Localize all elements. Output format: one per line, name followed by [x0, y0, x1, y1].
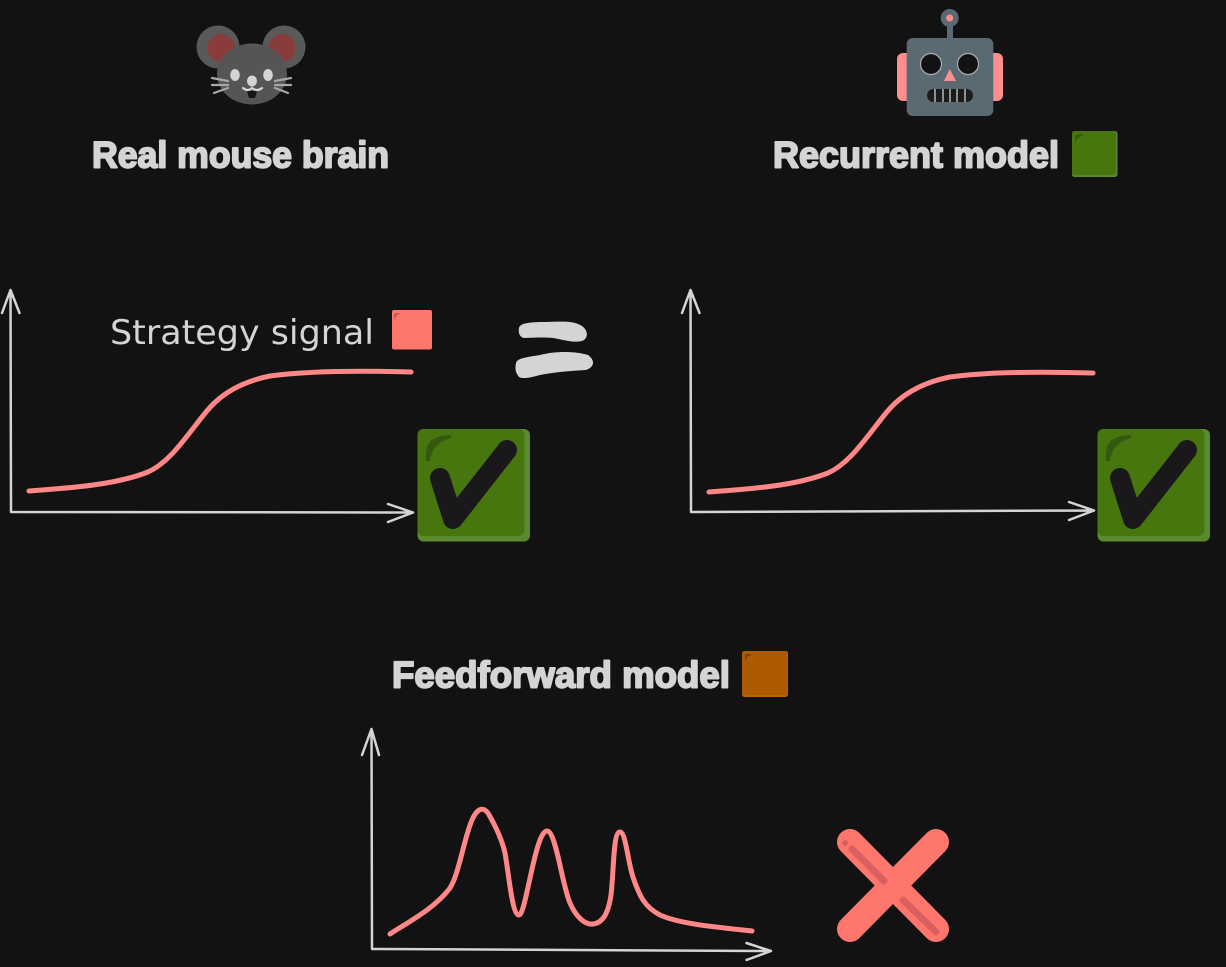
icon: check mark box, recurrent	[1098, 429, 1210, 542]
curve: sigmoid signal	[29, 371, 411, 491]
heading: real mouse brain: Real mouse brain	[92, 134, 389, 176]
icon: mouse face	[196, 26, 306, 104]
icon: red cross	[842, 840, 936, 932]
curve: recurrent sigmoid	[709, 372, 1093, 492]
heading: feedforward model: Feedforward model	[392, 654, 730, 696]
chart: real mouse strategy signal	[2, 290, 413, 522]
heading: recurrent model: Recurrent model	[773, 134, 1059, 176]
curve: three peaks	[390, 809, 752, 934]
symbol: hand-drawn equals sign	[515, 322, 593, 378]
icon: robot face	[897, 9, 1003, 116]
label: strategy signal: Strategy signal	[110, 313, 374, 353]
axes: feedforward chart	[362, 729, 771, 960]
chart: feedforward model signal	[362, 729, 771, 960]
icon: check mark box, mouse	[418, 429, 530, 542]
axes: real mouse chart	[2, 290, 413, 522]
chart: recurrent model signal	[682, 290, 1094, 520]
axes: recurrent chart	[682, 290, 1094, 520]
